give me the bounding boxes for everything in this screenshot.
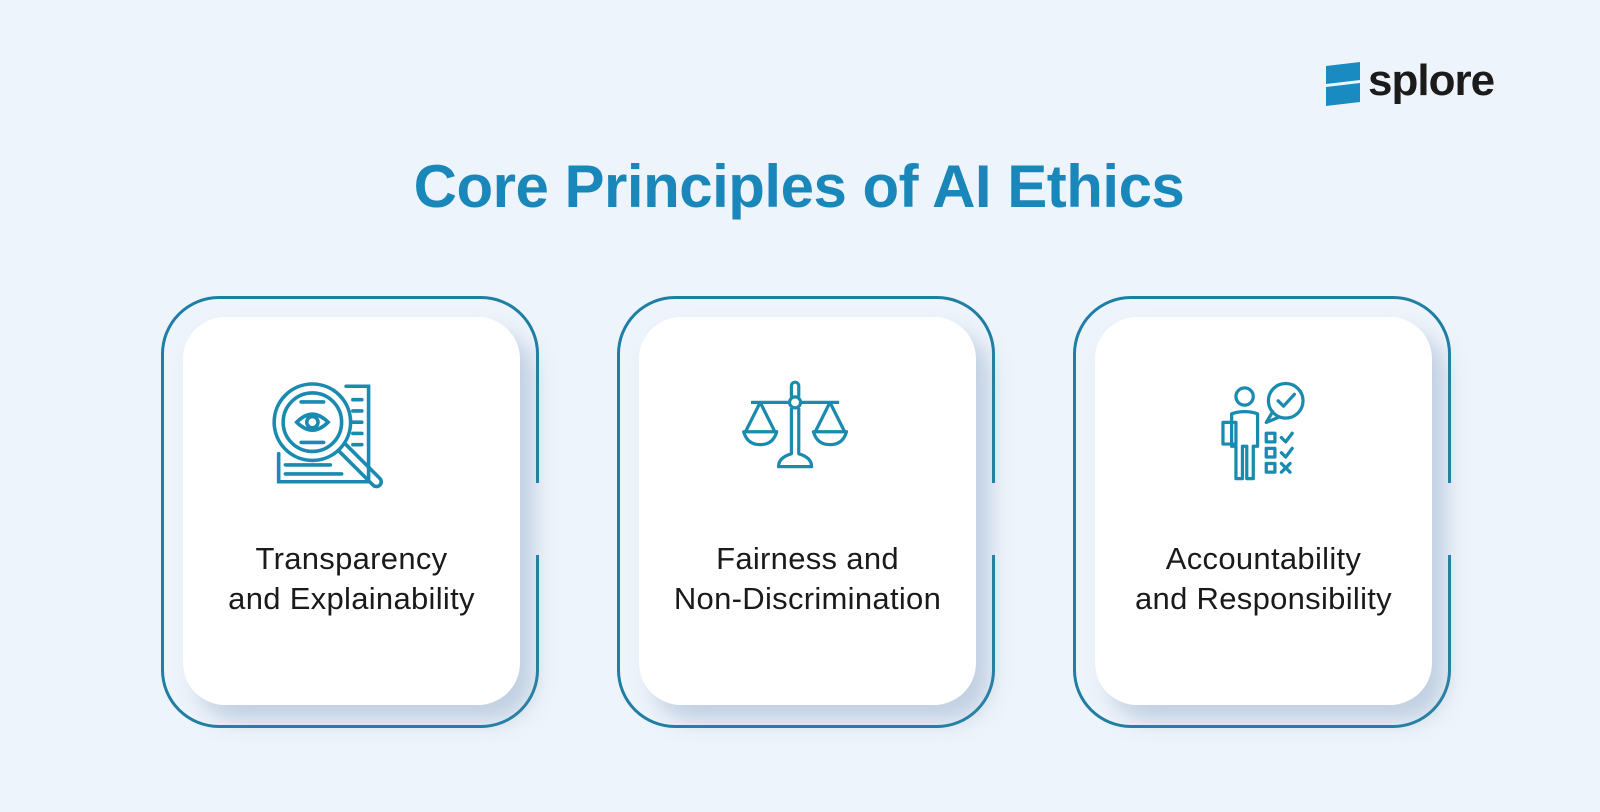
text: Non-Discrimination xyxy=(674,581,941,616)
icon: person with checklist xyxy=(1221,382,1305,480)
logo: splore xyxy=(1368,56,1494,105)
panel: accountability xyxy=(1073,296,1451,728)
panel: transparency xyxy=(161,296,539,728)
icon: magnifier over document xyxy=(272,382,383,488)
text: Accountability xyxy=(1166,541,1361,576)
title: Core Principles of AI Ethics xyxy=(414,153,1184,220)
text xyxy=(228,541,475,616)
icon: scales xyxy=(742,380,848,468)
text xyxy=(674,541,941,616)
text xyxy=(1135,541,1392,616)
text: Transparency xyxy=(256,541,447,576)
text: and Explainability xyxy=(228,581,475,616)
text: Fairness and xyxy=(716,541,899,576)
text: and Responsibility xyxy=(1135,581,1392,616)
panel: fairness xyxy=(617,296,995,728)
